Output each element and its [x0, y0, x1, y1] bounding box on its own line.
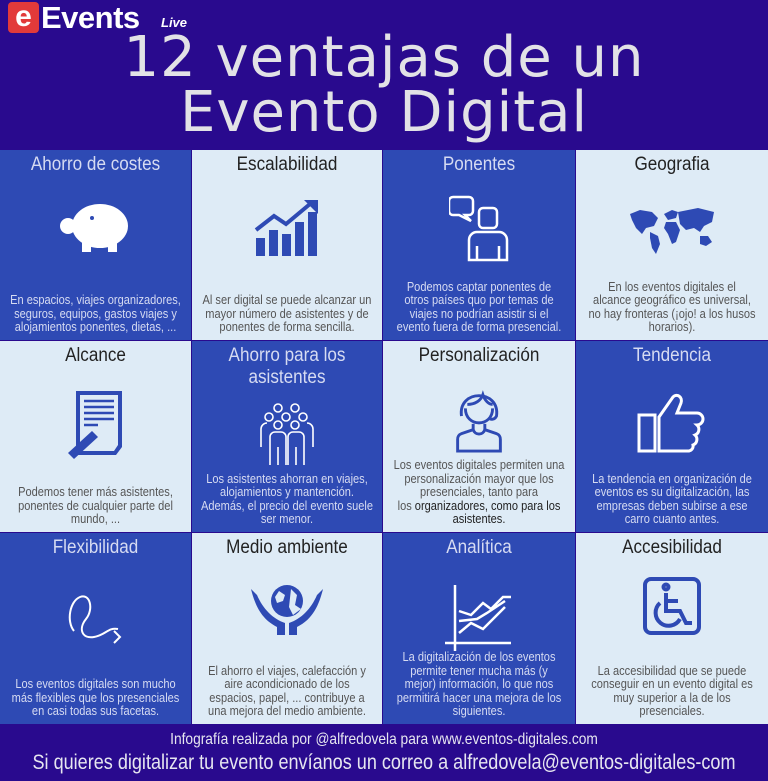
- icon: line chart: [445, 585, 511, 651]
- panel: Analítica: permite tener mucha más (y: [410, 663, 548, 678]
- icon: document with pencil: [68, 391, 122, 459]
- panel: Alcance: ponentes de cualquier parte del: [18, 498, 173, 513]
- logo: [8, 0, 187, 35]
- panel: Geografia: [576, 150, 768, 340]
- panel: Medio ambiente: espacios, papel, ... contribuye a: [209, 690, 365, 705]
- panel: Geografia: Geografia: [634, 154, 710, 175]
- panel: Tendencia: carro cuanto antes.: [625, 511, 719, 526]
- panel: Personalización: Personalización: [419, 345, 539, 366]
- panel: Escalabilidad: [192, 150, 382, 340]
- panel: Ahorro para los asistentes: Los asistentes ahorran en viajes,: [206, 471, 368, 486]
- icon: wheelchair: [643, 577, 701, 635]
- panel: Analítica: mejor) información, lo que nos: [405, 676, 553, 691]
- icon: thumbs up: [638, 394, 704, 452]
- panel: Escalabilidad: ponentes de forma sencilla.: [219, 319, 355, 334]
- panel: Tendencia: La tendencia en organización de: [592, 471, 752, 486]
- panel: Escalabilidad: Al ser digital se puede alcanzar un: [203, 292, 371, 307]
- panel: Escalabilidad: Escalabilidad: [237, 154, 337, 175]
- panel: Tendencia: eventos es su digitalización, las: [595, 484, 749, 499]
- panel: Escalabilidad: mayor número de asistentes y de: [205, 306, 369, 321]
- footer: Si quieres digitalizar tu evento envíanos un correo a alfredovela@eventos-digitales-com: [33, 751, 735, 774]
- panel: Geografia: alcance geográfico es universal,: [593, 292, 751, 307]
- panel: Tendencia: Tendencia: [633, 345, 711, 366]
- panel: Medio ambiente: El ahorro el viajes, calefacción y: [208, 663, 366, 678]
- panel: Ahorro para los asistentes: Ahorro para los: [229, 345, 345, 366]
- panel: Accesibilidad: La accesibilidad que se puede: [598, 663, 746, 678]
- panel: Flexibilidad: más flexibles que los presenciales: [12, 690, 179, 705]
- icon: woman: [456, 390, 502, 452]
- panel: Analítica: permitirá hacer una mejora de los: [397, 690, 561, 705]
- icon: piggy bank: [60, 204, 128, 252]
- panel: Ponentes: Ponentes: [443, 154, 515, 175]
- icon: growth chart: [254, 200, 318, 256]
- panel: Tendencia: empresas deben subirse a ese: [596, 498, 748, 513]
- panel: Ahorro de costes: Ahorro de costes: [31, 154, 160, 175]
- panel: Analítica: La digitalización de los eventos: [403, 649, 555, 664]
- panel: Ponentes: viajes no podrían asistir si el: [410, 306, 548, 321]
- panel: Alcance: [0, 341, 191, 532]
- panel: Analítica: siguientes.: [453, 703, 505, 718]
- panel: Ahorro de costes: [0, 150, 191, 340]
- icon: curvy arrow: [68, 595, 122, 644]
- panel: Medio ambiente: [192, 533, 382, 724]
- panel: Geografia: horarios).: [649, 319, 695, 334]
- panel: Tendencia: [576, 341, 768, 532]
- panel: Analítica: [383, 533, 575, 724]
- title: Evento Digital: [180, 80, 588, 145]
- panel: Personalización: presenciales, tanto para: [420, 484, 538, 499]
- panel: Medio ambiente: aire acondicionado de los: [224, 676, 350, 691]
- panel: Accesibilidad: Accesibilidad: [622, 537, 722, 558]
- panel: Ahorro para los asistentes: Además, el precio del evento suele: [201, 498, 373, 513]
- title: 12 ventajas de un: [123, 25, 645, 90]
- panel: Ahorro para los asistentes: asistentes: [248, 367, 325, 388]
- panel: Ahorro de costes: En espacios, viajes organizadores,: [10, 292, 181, 307]
- panel: Accesibilidad: [576, 533, 768, 724]
- panel: Flexibilidad: en casi todas sus facetas.: [32, 703, 159, 718]
- panel: Ahorro de costes: alojamientos ponentes, dietas, ...: [15, 319, 176, 334]
- panel: Accesibilidad: conseguir en un evento digital es: [591, 676, 753, 691]
- panel: Flexibilidad: Los eventos digitales son mucho: [15, 676, 176, 691]
- panel: Ahorro de costes: seguros, equipos, gastos viajes y: [14, 306, 177, 321]
- logo: e: [15, 0, 32, 33]
- title: [123, 25, 645, 145]
- icon: group of people: [260, 403, 314, 465]
- panel: Alcance: mundo, ...: [71, 511, 120, 526]
- panel: Analítica: Analítica: [446, 537, 512, 558]
- panel: Geografia: En los eventos digitales el: [608, 279, 736, 294]
- panel: Ahorro para los asistentes: ser menor.: [261, 511, 313, 526]
- panel: Ahorro para los asistentes: [192, 341, 382, 532]
- panel: Accesibilidad: presenciales.: [639, 703, 705, 718]
- panel: Ponentes: otros países quo por temas de: [404, 292, 554, 307]
- panel: Ponentes: [383, 150, 575, 340]
- panel: Personalización: Los eventos digitales permiten una: [394, 457, 564, 472]
- icon: speaker: [449, 196, 508, 262]
- panel: Medio ambiente: Medio ambiente: [226, 537, 348, 558]
- icon: hands with globe: [251, 585, 323, 635]
- panel: Personalización: [383, 341, 575, 532]
- panel: Personalización: los organizadores, como para los: [398, 498, 560, 513]
- panel: Ponentes: evento fuera de forma presencial.: [397, 319, 561, 334]
- panel: Geografia: no hay fronteras (¡ojo! a los husos: [588, 306, 756, 321]
- logo: Events: [41, 0, 140, 35]
- panel: Accesibilidad: muy superior a la de los: [613, 690, 731, 705]
- panel: Personalización: personalización mayor que los: [404, 471, 554, 486]
- panel: Medio ambiente: una mejora del medio ambiente.: [208, 703, 366, 718]
- panel: Ponentes: Podemos captar ponentes de: [407, 279, 551, 294]
- panel: Alcance: Podemos tener más asistentes,: [18, 484, 173, 499]
- icon: world map: [630, 208, 714, 254]
- footer: Infografía realizada por @alfredovela para www.eventos-digitales.com: [170, 731, 598, 748]
- footer: [33, 731, 735, 774]
- panel: Flexibilidad: [0, 533, 191, 724]
- panel: Personalización: asistentes.: [453, 511, 505, 526]
- panel: Alcance: Alcance: [65, 345, 126, 366]
- panel: Flexibilidad: Flexibilidad: [53, 537, 138, 558]
- panel: Ahorro para los asistentes: alojamientos y mantención.: [220, 484, 354, 499]
- logo: Live: [161, 15, 187, 30]
